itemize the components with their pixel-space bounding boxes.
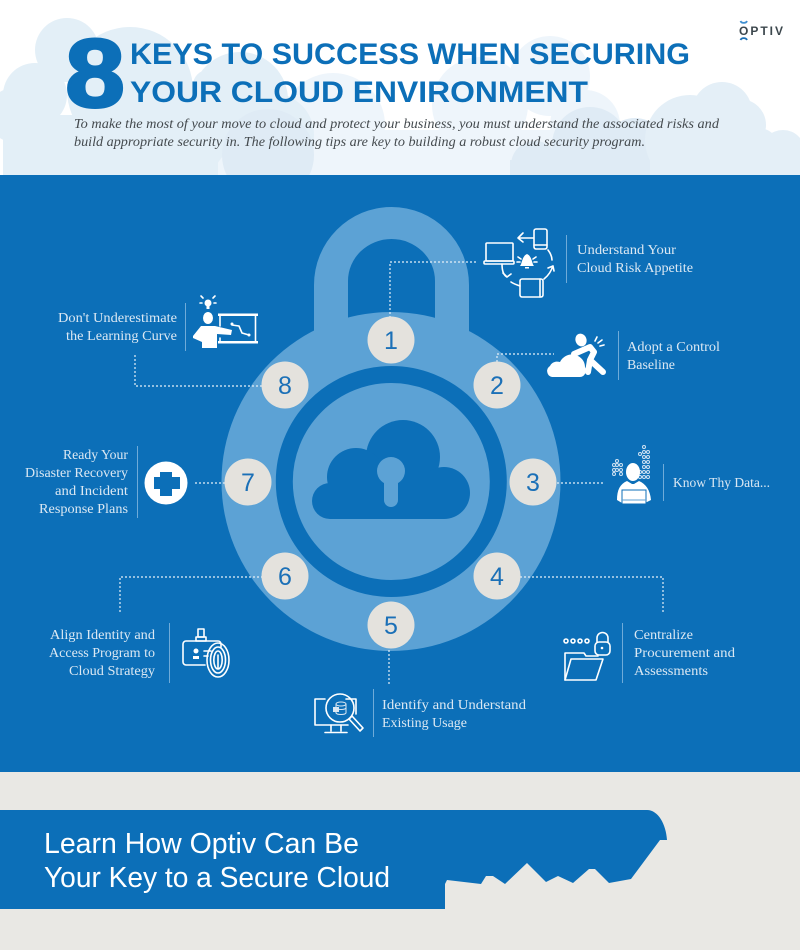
banner text: Your Key to a Secure Cloud: [44, 862, 390, 894]
label: Existing Usage: [382, 716, 467, 731]
item 1: cloud risk appetite: [484, 229, 693, 297]
label: Baseline: [627, 358, 675, 373]
label: Align Identity and: [50, 628, 155, 643]
icon: person with data columns: [612, 446, 651, 504]
label: Assessments: [634, 664, 708, 679]
intro text: To make the most of your move to cloud and protect your business, you must understand the associated risks and: [74, 116, 719, 131]
label: [382, 698, 526, 731]
marker 7: [224, 458, 272, 506]
icon: monitor with magnifier: [315, 694, 363, 732]
key-shaped call to action banner: [0, 810, 667, 909]
label: Response Plans: [39, 502, 128, 517]
header background clouds: [0, 0, 800, 201]
icon: person pushing cloud: [547, 332, 604, 377]
label: Procurement and: [634, 646, 735, 661]
marker 2: 2: [490, 372, 504, 400]
logo: Optiv: OPTIV: [739, 24, 783, 38]
connector lines: [120, 262, 663, 686]
icon: presenter at whiteboard: [193, 296, 258, 348]
marker 5: [368, 602, 414, 648]
label: [577, 243, 693, 276]
label: [627, 340, 720, 373]
label: [25, 448, 128, 517]
label: Cloud Strategy: [69, 664, 155, 679]
banner text: [44, 828, 390, 894]
icon: devices and alert bell: [484, 229, 554, 297]
marker 4: [474, 552, 520, 600]
item 7: disaster recovery: [25, 446, 188, 518]
marker 7: 7: [241, 469, 255, 497]
number markers: [224, 316, 556, 648]
icon: folder with padlock: [564, 632, 610, 680]
label: [49, 628, 155, 679]
label: Access Program to: [49, 646, 155, 661]
item 6: identity and access: [49, 623, 229, 683]
item 4: procurement: [564, 623, 735, 683]
banner shape: [0, 810, 667, 909]
label: Identify and Understand: [382, 698, 526, 713]
item 8: learning curve: [58, 296, 258, 351]
padlock illustration: [222, 207, 560, 651]
label: and Incident: [55, 484, 128, 499]
marker 1: [368, 316, 414, 364]
marker 4: 4: [490, 563, 504, 591]
item 2: control baseline: [547, 331, 720, 380]
cloud keyhole: [312, 420, 470, 519]
label: [634, 628, 735, 679]
padlock body: [222, 312, 560, 651]
title line 2: YOUR CLOUD ENVIRONMENT: [130, 76, 588, 109]
marker 3: 3: [526, 469, 540, 497]
padlock inner ring: [284, 374, 498, 588]
label: Disaster Recovery: [25, 466, 128, 481]
banner text: Learn How Optiv Can Be: [44, 828, 359, 860]
label: Understand Your: [577, 243, 676, 258]
item 5: existing usage: [315, 689, 526, 737]
panel: blue main panel: [0, 175, 800, 772]
marker 2: [474, 362, 520, 408]
label: Centralize: [634, 628, 693, 643]
label: Don't Underestimate: [58, 311, 177, 326]
intro text: build appropriate security in. The following tips are key to building a robust cloud security program.: [74, 134, 645, 149]
marker 8: [262, 362, 308, 408]
item 3: know thy data: [612, 446, 770, 504]
intro text: [74, 116, 719, 149]
label: Ready Your: [63, 448, 128, 463]
marker 3: [510, 458, 556, 506]
label: the Learning Curve: [66, 329, 177, 344]
label: [58, 311, 177, 344]
label: Know Thy Data...: [673, 476, 770, 491]
title: [65, 19, 690, 127]
icon: medical cross: [144, 462, 188, 504]
icon: ID badge with fingerprint: [183, 629, 229, 677]
marker 6: 6: [278, 563, 292, 591]
padlock shackle: [314, 207, 469, 340]
label: Adopt a Control: [627, 340, 720, 355]
title line 1: KEYS TO SUCCESS WHEN SECURING: [130, 38, 690, 71]
marker 8: 8: [278, 372, 292, 400]
footer background: [0, 772, 800, 950]
label: Cloud Risk Appetite: [577, 261, 693, 276]
marker 6: [262, 552, 308, 600]
marker 1: 1: [384, 327, 398, 355]
marker 5: 5: [384, 612, 398, 640]
big numeral 8: 8: [65, 19, 125, 127]
